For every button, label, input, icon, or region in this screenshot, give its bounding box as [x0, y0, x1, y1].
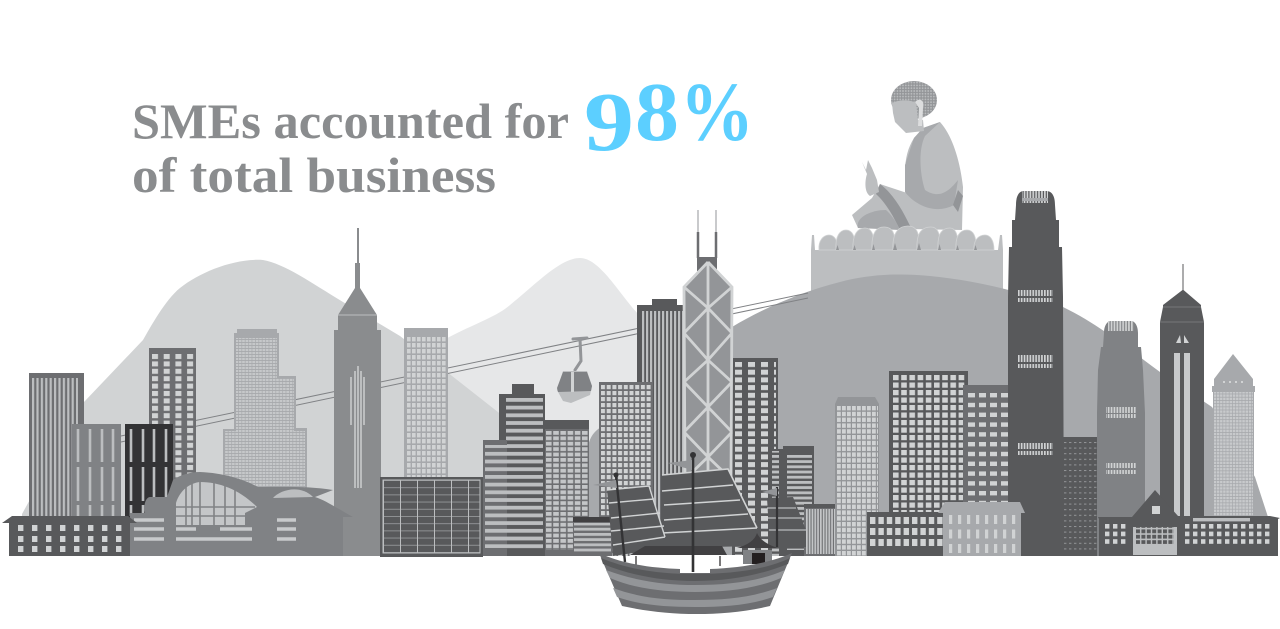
building: striped tall rear: [637, 299, 690, 556]
dome: [273, 489, 313, 498]
building: striped tower: [499, 384, 545, 556]
skyline: right group: [835, 191, 1280, 556]
petal joints: [836, 243, 977, 250]
highlighted figure: %: [680, 66, 754, 159]
tower: Bank of China: [684, 210, 732, 500]
tower: pale pyramid: [1212, 354, 1255, 520]
skyline: centre group: [380, 210, 838, 557]
antennae: [698, 210, 716, 245]
building: striped tall: [29, 373, 84, 518]
building: pale window tower: [835, 397, 879, 556]
Buddha body and robe: [852, 122, 963, 230]
legs: [858, 210, 900, 230]
highlighted figure: 9: [584, 76, 634, 169]
diagonal bracing: [684, 262, 732, 500]
title: [132, 66, 754, 203]
cable car: [121, 293, 808, 442]
skyline: left group: [2, 228, 381, 556]
lotus petals: [819, 226, 994, 250]
building: black grid: [125, 424, 173, 518]
gondola arm: [573, 338, 587, 370]
gondola cabin: [557, 371, 592, 403]
building: stepped striped low: [768, 446, 814, 556]
mountain: right hill: [588, 274, 1268, 556]
raised hand: [862, 160, 879, 196]
deck roof: [630, 546, 727, 555]
tower body: [684, 262, 732, 480]
fore mast: [593, 472, 625, 562]
rear mast and sail: [762, 487, 806, 547]
convention centre: [130, 472, 353, 556]
junk boat: [593, 452, 806, 614]
building: small by junk: [573, 517, 612, 556]
building: vertical stripe small: [804, 504, 838, 556]
building: waterfront hall: [1098, 490, 1280, 556]
convention centre body: [130, 472, 353, 556]
deck: [630, 555, 760, 572]
building: dark window block: [889, 371, 968, 516]
convention centre stripes: [134, 520, 296, 539]
ear: [915, 100, 923, 126]
cabin: [737, 533, 778, 564]
Buddha statue on lotus base: [811, 81, 1003, 292]
tower: pointed dark: [1160, 264, 1204, 520]
building: wide window block: [963, 385, 1013, 510]
tower: IFC two: [1008, 191, 1064, 556]
tower: central plaza: [334, 228, 381, 556]
heading line 2: of total business: [132, 147, 496, 203]
building: fine windows: [545, 420, 589, 556]
building: low block left: [2, 516, 137, 556]
building: grey grid: [72, 424, 121, 518]
robe inner shade: [905, 122, 958, 209]
fore sail: [607, 486, 665, 556]
mountain: centre light: [440, 258, 640, 556]
tower: IFC one grey: [1097, 321, 1145, 556]
face: [892, 100, 924, 133]
heading line 1: SMEs accounted for: [132, 93, 569, 149]
building: right of bank: [732, 358, 778, 556]
main sail: [662, 469, 757, 548]
highlighted figure: 8: [635, 66, 679, 159]
hair: [891, 81, 937, 119]
cables: [121, 293, 808, 442]
highlighted figure: [584, 66, 754, 169]
pedestal: [811, 235, 1003, 292]
convention centre windows: [176, 482, 257, 525]
lower robe fold: [876, 184, 912, 230]
building: tan window tower: [404, 328, 448, 480]
building: dotted dark: [1063, 437, 1098, 556]
building: lower window block: [867, 512, 944, 556]
building: window block: [599, 382, 652, 556]
building: grey roofed block: [938, 502, 1025, 556]
building: stepped light tower: [223, 329, 307, 500]
mountain: left: [22, 260, 515, 556]
hull: [599, 553, 792, 614]
building: mid windows: [149, 348, 196, 483]
building: striped annex: [483, 440, 507, 556]
main mast: [668, 452, 696, 572]
building: low dark grid: [380, 477, 483, 557]
